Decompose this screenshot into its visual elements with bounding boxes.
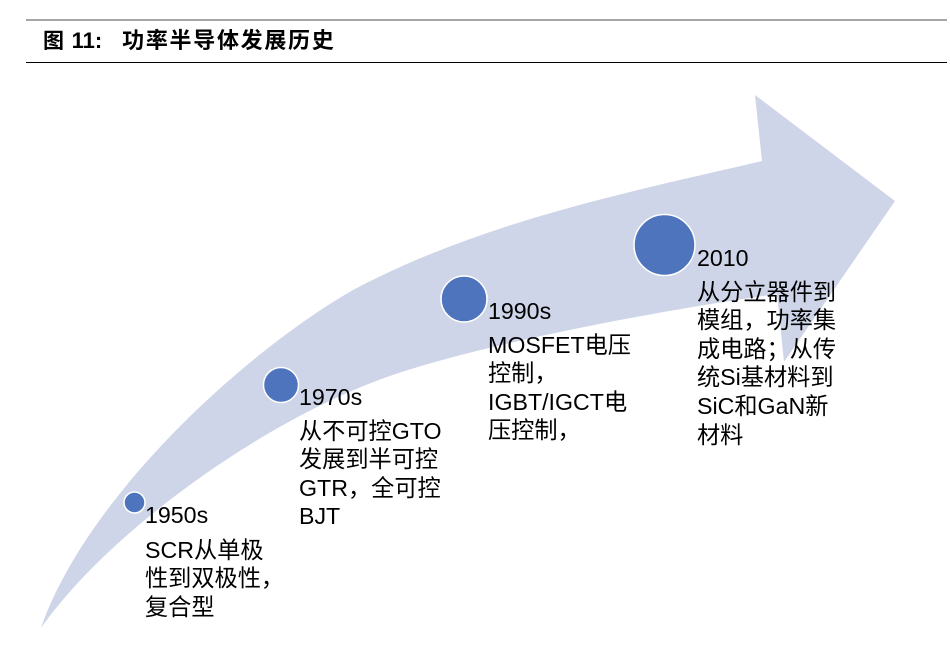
text: 1990s: 压控制，: [488, 417, 581, 443]
text: 1990s: [488, 298, 631, 443]
text: 1950s: [145, 502, 284, 620]
text: 2010: 2010 从分立器件到: [697, 245, 836, 305]
text: 1970s: 1970s 从不可控GTO: [299, 384, 442, 444]
text: 1950s: 性到双极性，: [145, 565, 284, 591]
text: 1970s: GTR，全可控: [299, 475, 441, 501]
curved arrow: [41, 95, 895, 628]
marker: 1990s: [441, 276, 487, 322]
text: 1950s: 复合型: [145, 594, 215, 620]
text: 1970s: BJT: [299, 503, 340, 529]
text: 2010: SiC和GaN新: [697, 393, 828, 419]
marker: 1970s: [264, 368, 298, 402]
text: 1970s: [299, 384, 442, 529]
marker: 1950s: [124, 492, 145, 513]
title: 图 11: 功率半导体发展历史: [43, 28, 335, 53]
text: 1990s: 控制，: [488, 360, 558, 386]
text: 1990s: 1990s MOSFET电压: [488, 298, 631, 358]
text: 2010: 模组，功率集: [697, 307, 836, 333]
text: 2010: 材料: [697, 422, 743, 448]
marker: 2010: [634, 214, 695, 276]
text: 1950s: 1950s SCR从单极: [145, 502, 264, 563]
text: 1990s: IGBT/IGCT电: [488, 389, 627, 415]
text: 2010: 统Si基材料到: [697, 364, 834, 390]
text: 1970s: 发展到半可控: [299, 446, 438, 472]
text: 2010: [697, 245, 836, 448]
text: 2010: 成电路；从传: [697, 336, 836, 362]
